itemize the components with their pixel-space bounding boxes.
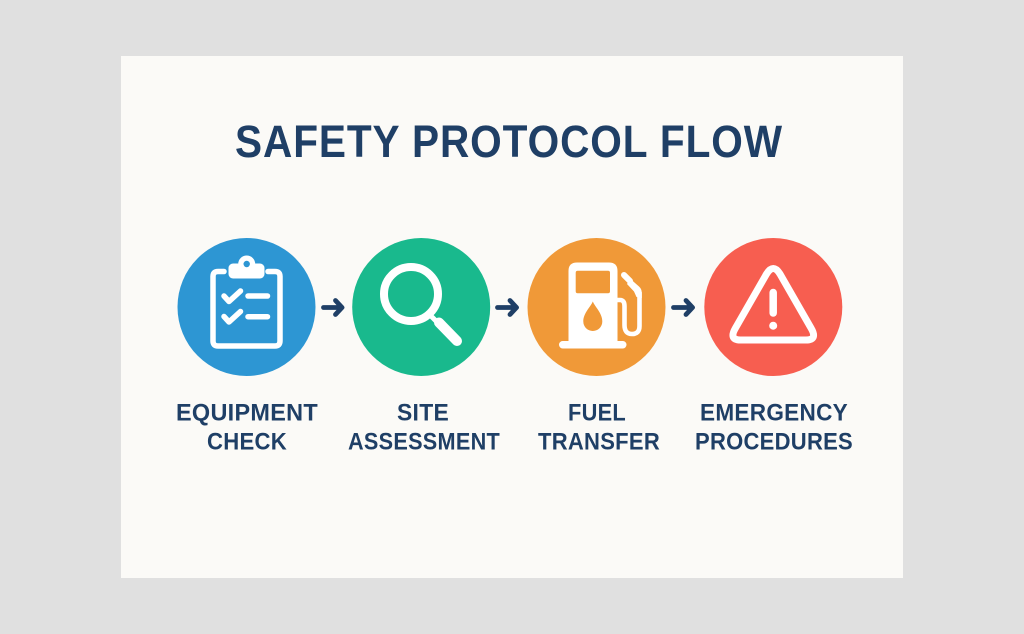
icon: clipboard checklist bbox=[178, 238, 316, 376]
title: SAFETY PROTOCOL FLOW bbox=[235, 116, 783, 167]
label: fuel transfer: TRANSFER bbox=[538, 428, 660, 456]
step 2: site assessment bbox=[348, 238, 500, 456]
panel: main card bbox=[121, 56, 903, 578]
label: emergency procedures: EMERGENCY bbox=[700, 400, 848, 426]
arrow: step 2 to step 3 bbox=[498, 300, 516, 314]
label: emergency procedures: PROCEDURES bbox=[695, 428, 853, 456]
label: site assessment bbox=[348, 400, 500, 456]
step 3: fuel transfer bbox=[528, 238, 666, 456]
label: site assessment: ASSESSMENT bbox=[348, 428, 500, 456]
icon: magnifying glass bbox=[352, 238, 490, 376]
icon: warning triangle bbox=[704, 238, 842, 376]
label: fuel transfer bbox=[538, 400, 660, 456]
label: emergency procedures bbox=[695, 400, 853, 456]
step 1: equipment check bbox=[176, 238, 318, 456]
label: equipment check bbox=[176, 400, 318, 456]
arrow: step 3 to step 4 bbox=[674, 300, 692, 314]
step 4: emergency procedures bbox=[695, 238, 853, 456]
label: equipment check: EQUIPMENT bbox=[176, 400, 318, 426]
icon: fuel pump bbox=[528, 238, 666, 376]
label: fuel transfer: FUEL bbox=[568, 400, 626, 426]
arrow: step 1 to step 2 bbox=[324, 300, 342, 314]
label: site assessment: SITE bbox=[397, 400, 449, 426]
label: equipment check: CHECK bbox=[207, 428, 287, 456]
